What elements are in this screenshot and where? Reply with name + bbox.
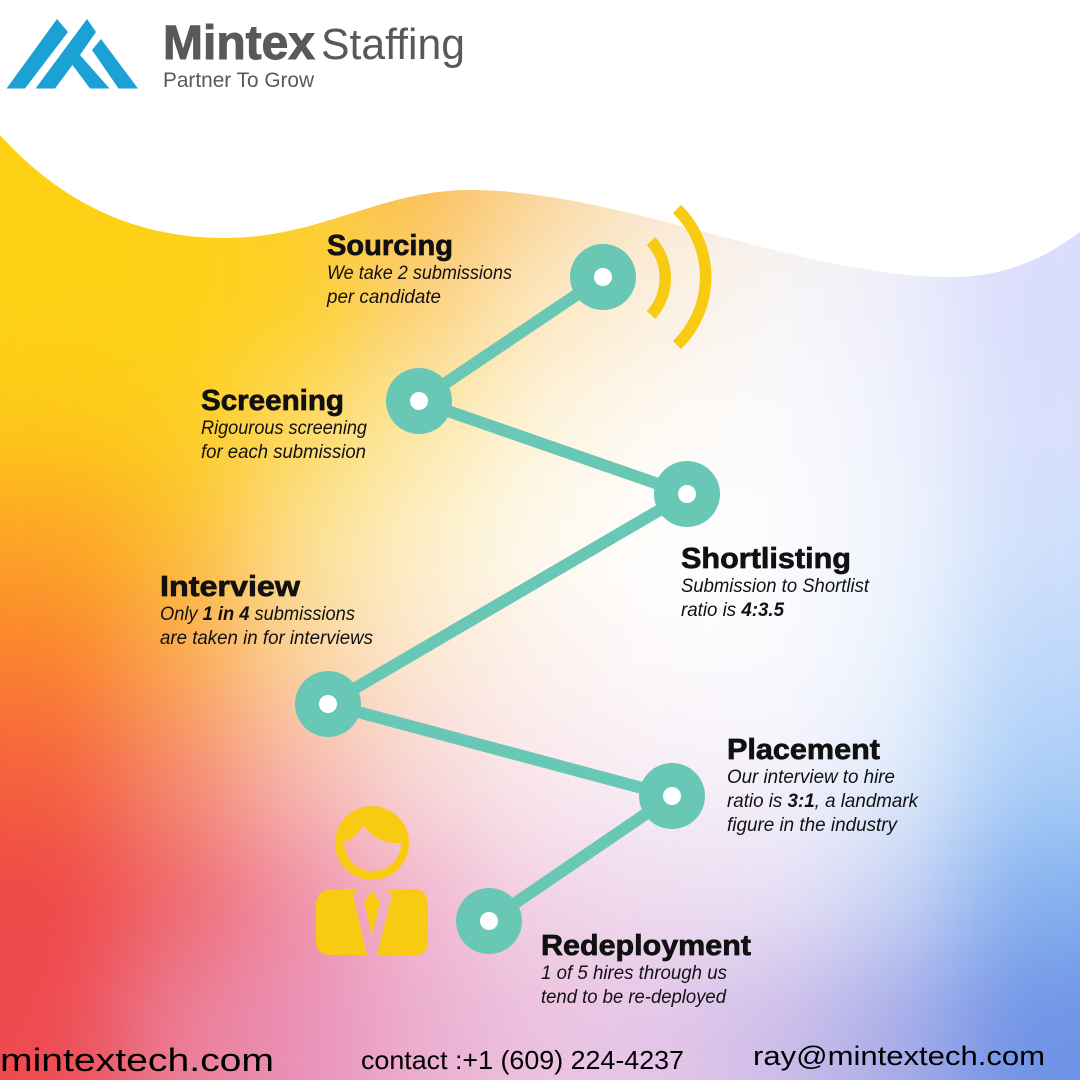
footer: phone: contact :+1 (609) 224-4237 xyxy=(361,1045,684,1075)
node: shortlisting xyxy=(654,461,720,527)
logo wordmark: Partner To Grow xyxy=(163,69,315,92)
node: sourcing xyxy=(570,244,636,310)
step: interview: Only 1 in 4 submissions xyxy=(160,604,355,625)
white wave header xyxy=(0,0,1080,277)
step: placement: Placement xyxy=(727,734,880,766)
step: shortlisting: Shortlisting xyxy=(681,543,851,575)
step: redeployment: tend to be re-deployed xyxy=(541,987,727,1008)
step: redeployment: 1 of 5 hires through us xyxy=(541,963,727,984)
node: redeployment xyxy=(456,888,522,954)
step: interview: are taken in for interviews xyxy=(160,628,373,649)
step: sourcing: per candidate xyxy=(326,287,441,308)
node: placement xyxy=(639,763,705,829)
step: placement: Our interview to hire xyxy=(727,767,895,788)
step: interview xyxy=(160,571,373,649)
step: placement: ratio is 3:1, a landmark xyxy=(727,791,919,812)
footer: website: mintextech.com xyxy=(0,1042,274,1078)
step: placement xyxy=(727,734,919,836)
logo wordmark: Staffing xyxy=(321,20,465,69)
icon: person in suit xyxy=(316,806,428,955)
node: screening xyxy=(386,368,452,434)
step: sourcing: Sourcing xyxy=(327,230,453,262)
step: redeployment xyxy=(541,930,751,1008)
step: placement: figure in the industry xyxy=(727,815,898,836)
footer: email: ray@mintextech.com xyxy=(753,1041,1045,1071)
step: redeployment: Redeployment xyxy=(541,930,751,962)
step: screening xyxy=(201,385,367,463)
step: shortlisting: ratio is 4:3.5 xyxy=(681,600,784,621)
logo icon xyxy=(6,19,138,88)
step: interview: Interview xyxy=(160,571,300,603)
node: interview xyxy=(295,671,361,737)
step: shortlisting xyxy=(681,543,870,621)
step: sourcing: We take 2 submissions xyxy=(327,263,512,284)
step: shortlisting: Submission to Shortlist xyxy=(681,576,870,597)
step: screening: Rigourous screening xyxy=(201,418,367,439)
logo wordmark: Mintex xyxy=(163,17,315,70)
step: sourcing xyxy=(326,230,512,308)
connector path xyxy=(328,277,687,921)
logo wordmark xyxy=(163,17,465,92)
icon: signal waves xyxy=(651,209,706,345)
step: screening: Screening xyxy=(201,385,344,417)
step: screening: for each submission xyxy=(201,442,366,463)
